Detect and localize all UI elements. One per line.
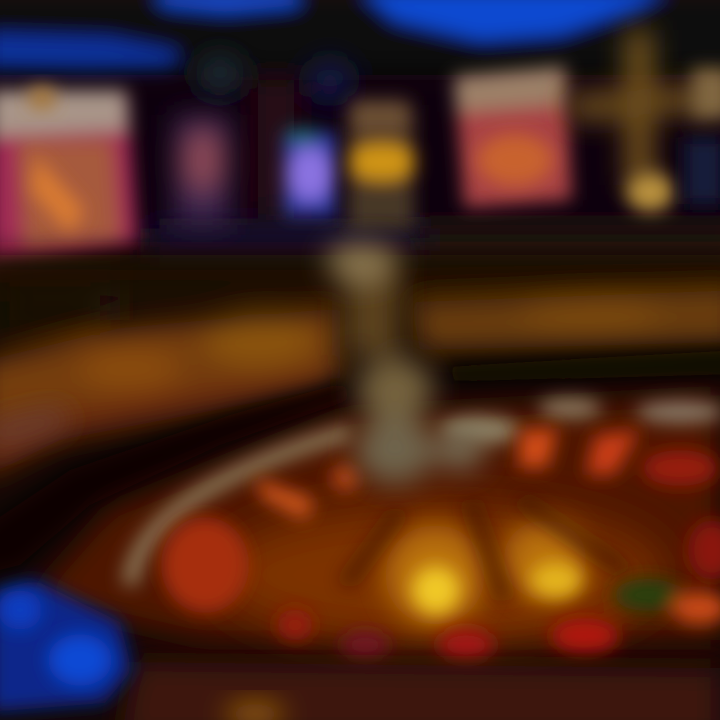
right edge poster [684,68,720,204]
wheel: mottled outer rim right [440,398,720,444]
blue light: bottom left [0,580,132,712]
poster: left pink panel [0,86,138,268]
wheel: inner bowl [215,505,665,645]
wheel: pale outer rim left [130,432,350,585]
wheel: yellow glow right [503,520,587,600]
central spindle [326,242,484,484]
wheel: yellow glow left [385,525,485,625]
roulette wheel [30,395,720,661]
poster: right pink panel [454,66,572,208]
wooden amber band behind the wheel [0,255,720,480]
poster: glowing violet screen [284,128,336,216]
wheel: base [30,395,720,640]
pale smear on the left wood [0,408,70,448]
golden ornament base [626,172,674,212]
dark wheel rim shadows [0,350,720,575]
wheel: dark spokes [345,500,625,600]
poster: small purple panel [174,115,230,225]
ceiling lights: blue streaks [0,0,720,80]
wheel: red number pockets [161,428,720,613]
central column: amber lamp [348,100,416,228]
wheel: lower pockets ring [277,579,720,661]
golden cross ornament [565,30,720,185]
table glow [225,702,285,720]
table front: brown wood [120,662,720,720]
upper wall: dark band behind posters [0,54,720,320]
